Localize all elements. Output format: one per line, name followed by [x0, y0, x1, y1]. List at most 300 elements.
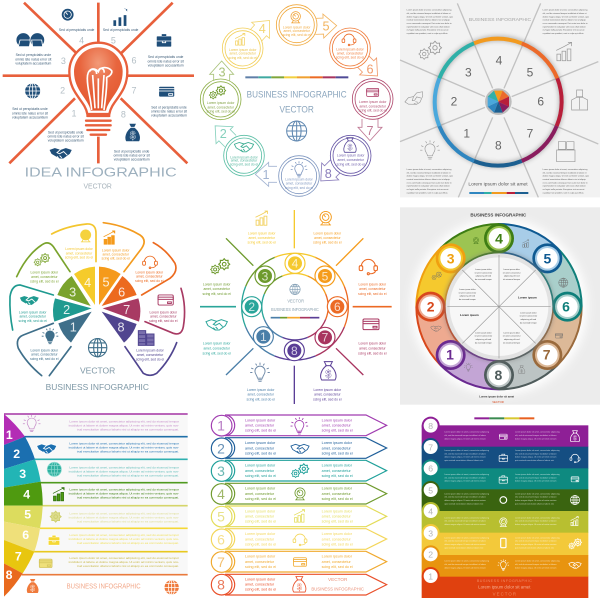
band text: dolore magna aliqua. Ut enim ad minim veniam: [515, 543, 557, 546]
numbered discs: 4: [292, 257, 299, 271]
row text: Lorem ipsum dolor: [245, 464, 276, 468]
band text: dolore magna aliqua. Ut enim ad minim veniam: [444, 437, 486, 440]
outer text: Lorem ipsum dolor: [247, 388, 275, 392]
numbered discs: 1: [260, 330, 267, 344]
row text: trud exercitation ullamco laboris nisi ut aliquip ex ea commodo consequat.: [77, 449, 179, 453]
tab numbers: 4: [428, 506, 433, 516]
spokes: [200, 210, 392, 404]
text blocks: omnis iste natus error sit: [15, 57, 52, 61]
petal text: scing elit, sed do ei: [149, 319, 178, 323]
row text: Lorem ipsum dolor sit amet, consectetur adipiscing elit, sed do eiusmod tempor: [69, 419, 179, 423]
row text: amet, consectetur: [322, 469, 352, 473]
row text: scing elit, sed do ei: [322, 429, 353, 433]
outer text: amet, consectetur: [359, 287, 386, 291]
row text: Lorem ipsum dolor: [322, 532, 353, 536]
arc numbers: 3: [19, 467, 26, 481]
circle text: scing elit, sed do ei: [230, 163, 258, 167]
row text: Lorem ipsum dolor sit amet, consectetur adipiscing elit, sed do eiusmod tempor: [69, 488, 179, 492]
center text: adipiscing elit sed: [475, 338, 491, 341]
text blocks: nostrud exercitation ullamco laboris nisi ut aliquip: [543, 178, 587, 181]
text blocks: Sed ut perspiciatis unde: [16, 53, 51, 57]
title: BUSINESS INFOGRAPHIC: [469, 17, 532, 23]
row numbers: 5: [217, 509, 225, 525]
text blocks: reprehenderit in voluptate velit esse cillum dolore: [407, 25, 451, 28]
circle text: Lorem ipsum dolor: [283, 25, 311, 29]
row text: Lorem ipsum dolor: [245, 555, 276, 559]
band text: elit, sed do eiusmod tempor incididunt ut labore: [515, 452, 557, 455]
text blocks: omnis iste natus error sit: [148, 59, 184, 63]
row numbers: [217, 418, 225, 593]
arrow 6: [211, 529, 387, 550]
circle text: Lorem ipsum dolor: [337, 154, 365, 158]
outer text: scing elit, sed do ei: [247, 397, 275, 401]
band text: Lorem ipsum dolor sit amet, consectetur adipiscing: [515, 516, 560, 519]
band text: dolore magna aliqua. Ut enim ad minim veniam: [444, 480, 486, 483]
rainbow bar: [245, 74, 348, 80]
arrow 7: [211, 551, 387, 572]
outer text: scing elit, sed do ei: [248, 241, 276, 245]
row text: scing elit, sed do ei: [322, 565, 353, 569]
outer text: scing elit, sed do ei: [358, 351, 387, 355]
petal text: scing elit, sed do ei: [102, 257, 130, 261]
row text: Lorem ipsum dolor: [245, 441, 276, 445]
text blocks: reprehenderit in voluptate velit esse cillum dolore: [543, 185, 587, 188]
band text: dolore magna aliqua. Ut enim ad minim veniam: [444, 566, 486, 569]
number discs: [420, 228, 578, 385]
row text: Lorem ipsum dolor sit amet, consectetur adipiscing elit, sed do eiusmod tempor: [69, 512, 179, 516]
outer text: [203, 231, 387, 401]
band text: quis nostrud exercitation ullamco laboris nisi: [444, 502, 484, 505]
petal text: Lorem ipsum dolor: [136, 270, 164, 274]
row text: trud exercitation ullamco laboris nisi ut aliquip ex ea commodo consequat.: [77, 427, 179, 431]
row text: amet, consectetur: [245, 515, 275, 519]
center text: adipiscing elit sed: [459, 295, 475, 298]
petal text: Lorem ipsum dolor: [150, 310, 178, 314]
band text: Lorem ipsum dolor sit amet, consectetur adipiscing: [515, 473, 560, 476]
center bar: [271, 315, 319, 320]
row icons: [291, 417, 309, 592]
arc numbers: 2: [13, 447, 20, 461]
circle text: scing elit, sed do ei: [283, 33, 311, 37]
row text: [245, 418, 353, 592]
numbers: 5: [543, 250, 551, 266]
row text: amet, consectetur: [322, 560, 352, 564]
outer text: scing elit, sed do ei: [313, 241, 342, 245]
band text: elit, sed do eiusmod tempor incididunt ut labore: [515, 434, 557, 437]
row text: scing elit, sed do ei: [322, 542, 353, 546]
center text: Lorem ipsum dolor: [475, 268, 492, 271]
text blocks: [12, 28, 187, 162]
text blocks: ex ea commodo consequat. Duis aute irure dolor in: [543, 22, 588, 25]
circle text: Lorem ipsum dolor: [359, 100, 387, 104]
rows background: [4, 414, 188, 575]
pie wedges: [53, 267, 140, 343]
circle text: Lorem ipsum dolor: [207, 101, 235, 105]
center labels: Lorem ipsum: [460, 313, 479, 317]
row text: trud exercitation ullamco laboris nisi ut aliquip ex ea commodo consequat.: [77, 496, 179, 500]
panel: grey wheel: [400, 0, 600, 197]
step numbers: 3: [61, 56, 66, 66]
arc numbers: 5: [24, 507, 31, 521]
arrow 1: [211, 415, 387, 436]
step numbers: 8: [121, 109, 126, 119]
tab numbers: 1: [428, 571, 433, 581]
numbers: 8: [494, 367, 502, 383]
circle text: scing elit, sed do ei: [359, 109, 387, 113]
outer text: amet, consectetur: [203, 346, 231, 350]
center text: do eiusmod tempor: [475, 278, 492, 281]
outer icons: [206, 211, 379, 381]
petal text: Lorem ipsum dolor: [31, 348, 59, 352]
row text: incididunt ut labore et dolore magna aliqua. Ut enim ad minim veniam, quis nos-: [69, 492, 179, 496]
arrow 4: [211, 483, 387, 504]
text blocks: dolore magna aliqua. Ut enim ad minim veniam, quis: [407, 15, 453, 18]
text blocks: Lorem ipsum dolor sit amet, consectetur adipiscing: [407, 168, 451, 171]
text blocks: Sed ut perspiciatis unde: [114, 149, 150, 153]
tab numbers: [428, 421, 433, 581]
center text: do eiusmod tempor: [459, 298, 476, 301]
outer text: amet, consectetur: [314, 236, 341, 240]
row text: amet, consectetur: [322, 515, 352, 519]
ring shadow: [435, 38, 562, 165]
row text: amet, consectetur: [245, 560, 275, 564]
band text: elit, sed do eiusmod tempor incididunt ut labore: [515, 496, 557, 499]
band text: elit, sed do eiusmod tempor incididunt ut labore: [444, 452, 487, 455]
text blocks: Sed ut perspiciatis unde: [151, 105, 187, 109]
outer text: Lorem ipsum dolor: [314, 231, 342, 235]
row numbers: 2: [217, 440, 225, 456]
row text: Lorem ipsum dolor sit amet, consectetur adipiscing elit, sed do eiusmod tempor: [69, 466, 179, 470]
text blocks: eu fugiat nulla pariatur. Excepteur sint occaecat: [543, 188, 585, 191]
glow: [411, 218, 587, 395]
text blocks: voluptatem accusantium: [151, 114, 187, 118]
bands: [422, 425, 588, 598]
band icons: [498, 431, 581, 570]
text blocks: Sed ut perspiciatis unde: [59, 28, 95, 32]
outer text: Lorem ipsum dolor: [203, 342, 231, 346]
panel: swoosh ring: [400, 207, 600, 405]
arc numbers: 4: [23, 487, 30, 501]
row numbers: 6: [217, 531, 225, 547]
row text: Lorem ipsum dolor: [245, 487, 276, 491]
ring circles: [200, 5, 393, 196]
center hub: [485, 88, 512, 115]
circle text: Lorem ipsum dolor: [230, 155, 259, 159]
arrow 2: [211, 438, 387, 459]
band text: Lorem ipsum dolor sit amet, consectetur adipiscing: [444, 516, 489, 519]
row text: Lorem ipsum dolor: [322, 555, 353, 559]
row text: Lorem ipsum dolor: [245, 532, 276, 536]
row text: Lorem ipsum dolor: [322, 509, 353, 513]
title: BUSINESS INFOGRAPHIC: [247, 90, 347, 100]
row text: Lorem ipsum dolor: [245, 577, 276, 581]
arrow 5: [211, 506, 387, 527]
title: BUSINESS INFOGRAPHIC: [311, 587, 365, 592]
numbers: 5: [527, 65, 534, 79]
row text: Lorem ipsum dolor: [245, 418, 276, 422]
center text: do eiusmod tempor: [503, 341, 520, 344]
arrow numbers: 5: [322, 20, 330, 34]
center text: sit amet consectetur: [474, 271, 493, 274]
center text: adipiscing elit sed: [504, 275, 520, 278]
caption: Lorem ipsum dolor sit amet: [479, 395, 514, 399]
text blocks: nostrud exercitation ullamco laboris nisi ut aliquip: [407, 19, 451, 22]
text blocks: voluptatem accusantium: [15, 61, 52, 65]
band text: elit, sed do eiusmod tempor incididunt ut labore: [515, 540, 557, 543]
tab numbers: 7: [428, 442, 433, 452]
ring segments: [416, 223, 582, 390]
petal text: amet, consectetur: [31, 353, 58, 357]
title: BUSINESS INFOGRAPHIC: [46, 382, 149, 392]
numbered discs: 2: [248, 300, 255, 314]
arrow numbers: 7: [366, 124, 374, 138]
arrow 3: [211, 460, 387, 481]
wedge numbers: 4: [84, 276, 91, 290]
band text: dolore magna aliqua. Ut enim ad minim veniam: [515, 456, 557, 459]
center globe: [290, 284, 300, 294]
text blocks: nostrud exercitation ullamco laboris nisi ut aliquip: [543, 19, 587, 22]
row text: amet, consectetur: [245, 446, 275, 450]
band text: elit, sed do eiusmod tempor incididunt ut labore: [515, 520, 557, 523]
outer text: Lorem ipsum dolor: [359, 282, 387, 286]
text blocks: voluptatem accusantium: [48, 139, 84, 143]
icon: globe: [287, 121, 307, 141]
step numbers: 1: [71, 109, 76, 119]
segment 8: [499, 355, 547, 375]
row text: Lorem ipsum dolor: [322, 487, 353, 491]
wedge numbers: 6: [118, 285, 125, 299]
text blocks: Lorem ipsum dolor sit amet, consectetur adipiscing: [543, 9, 587, 12]
arrow numbers: 1: [262, 168, 270, 182]
petal text: scing elit, sed do ei: [65, 255, 93, 259]
row text: trud exercitation ullamco laboris nisi ut aliquip ex ea commodo consequat.: [77, 541, 179, 545]
petal text: [19, 247, 178, 361]
center text: Lorem ipsum dolor: [459, 288, 476, 291]
segment 2: [416, 292, 451, 355]
panel: pie with outlined petals: [10, 223, 185, 392]
text blocks: cupidatat non proident, sunt in culpa qui officia: [407, 32, 448, 35]
row text: trud exercitation ullamco laboris nisi ut aliquip ex ea commodo consequat.: [77, 520, 179, 524]
arc numbers: 8: [6, 568, 13, 582]
center text: sit amet consectetur: [503, 271, 521, 274]
outer text: Lorem ipsum dolor: [248, 231, 276, 235]
icons: [404, 41, 588, 162]
title: BUSINESS INFOGRAPHIC: [67, 581, 141, 590]
colored ring: [435, 39, 562, 166]
text blocks: Lorem ipsum dolor sit amet, consectetur adipiscing: [543, 168, 587, 171]
band text: dolore magna aliqua. Ut enim ad minim veniam: [444, 456, 486, 459]
step numbers: 7: [131, 85, 136, 95]
number tabs: [422, 417, 440, 585]
row text: amet, consectetur: [245, 492, 275, 496]
band text: quis nostrud exercitation ullamco laboris nisi: [515, 546, 554, 549]
outer text: Lorem ipsum dolor: [314, 388, 342, 392]
row text: amet, consectetur: [322, 446, 352, 450]
head of segment 8: [484, 360, 514, 390]
center text: sit amet consectetur: [474, 335, 493, 338]
text blocks: eu fugiat nulla pariatur. Excepteur sint occaecat: [407, 188, 449, 191]
row text: scing elit, sed do ei: [245, 451, 276, 455]
text blocks: elit, sed do eiusmod tempor incididunt ut labore et: [407, 12, 451, 15]
band text: dolore magna aliqua. Ut enim ad minim veniam: [444, 543, 486, 546]
numbers: [427, 230, 570, 383]
ring: [242, 253, 348, 360]
row text: Lorem ipsum dolor: [322, 441, 353, 445]
numbers: 1: [446, 346, 454, 362]
band text: elit, sed do eiusmod tempor incididunt ut labore: [444, 563, 487, 566]
circle text: scing elit, sed do ei: [207, 110, 235, 114]
row text: Lorem ipsum dolor sit amet, consectetur adipiscing elit, sed do eiusmod tempor: [69, 556, 179, 560]
top rainbow bar: [474, 415, 534, 421]
row text: scing elit, sed do ei: [322, 520, 353, 524]
center text: [458, 268, 538, 344]
row text: incididunt ut labore et dolore magna aliqua. Ut enim ad minim veniam, quis nos-: [69, 516, 179, 520]
band text: quis nostrud exercitation ullamco laboris nisi: [515, 502, 554, 505]
band title: BUSINESS INFOGRAPHIC: [477, 579, 532, 583]
band text: elit, sed do eiusmod tempor incididunt ut labore: [444, 434, 487, 437]
petal text: amet, consectetur: [137, 353, 164, 357]
numbers: 7: [543, 346, 551, 362]
band icons: [431, 237, 568, 373]
wedge numbers: 8: [117, 320, 125, 334]
band text: Lorem ipsum dolor sit amet, consectetur adipiscing: [444, 431, 489, 434]
outer text: scing elit, sed do ei: [313, 397, 342, 401]
tab numbers: 6: [428, 464, 433, 474]
text blocks: voluptatem accusantium: [148, 64, 184, 68]
step numbers: 6: [131, 55, 136, 65]
text blocks: omnis iste natus error sit: [12, 111, 48, 115]
band text: Lorem ipsum dolor sit amet, consectetur adipiscing: [515, 560, 560, 563]
band caption: Lorem ipsum dolor sit amet: [478, 585, 531, 590]
outer text: amet, consectetur: [203, 287, 231, 291]
panel: ring with spokes: [200, 210, 392, 404]
circle text: Lorem ipsum dolor: [229, 48, 257, 52]
row text: incididunt ut labore et dolore magna aliqua. Ut enim ad minim veniam, quis nos-: [69, 445, 179, 449]
petal text: amet, consectetur: [136, 275, 163, 279]
petal text: Lorem ipsum dolor: [136, 349, 165, 353]
row text: amet, consectetur: [322, 424, 352, 428]
step numbers: 2: [60, 85, 65, 95]
band text: Lorem ipsum dolor sit amet, consectetur adipiscing: [515, 492, 560, 495]
text blocks: dolore magna aliqua. Ut enim ad minim veniam, quis: [407, 175, 453, 178]
panel background: [400, 207, 600, 405]
outer text: Lorem ipsum dolor: [359, 342, 387, 346]
center text: sit amet consectetur: [503, 335, 521, 338]
band text: dolore magna aliqua. Ut enim ad minim veniam: [515, 499, 557, 502]
wedge numbers: [63, 275, 130, 334]
spokes: [400, 3, 598, 197]
outer text: scing elit, sed do ei: [358, 292, 387, 296]
band text: quis nostrud exercitation ullamco laboris nisi: [515, 459, 554, 462]
numbers: 7: [527, 127, 534, 141]
petal icons: [19, 230, 173, 357]
text blocks: eu fugiat nulla pariatur. Excepteur sint occaecat: [543, 29, 585, 32]
circle text: Lorem ipsum dolor: [285, 177, 314, 181]
band text: elit, sed do eiusmod tempor incididunt ut labore: [515, 563, 557, 566]
circle text: amet, consectetur: [207, 105, 235, 109]
text blocks: reprehenderit in voluptate velit esse cillum dolore: [543, 25, 587, 28]
numbered discs: 7: [322, 331, 329, 345]
band text: Lorem ipsum dolor sit amet, consectetur adipiscing: [444, 560, 489, 563]
row text: Lorem ipsum dolor: [322, 464, 353, 468]
row text: amet, consectetur: [245, 537, 275, 541]
panel: horizontal bars with left arc: [4, 414, 188, 597]
circle text: scing elit, sed do ei: [285, 186, 313, 190]
arrow numbers: 4: [259, 22, 266, 36]
center text: do eiusmod tempor: [503, 278, 520, 281]
icon: lightbulb: [69, 43, 127, 135]
center text: Lorem ipsum dolor: [520, 311, 537, 314]
center text: adipiscing elit sed: [475, 275, 491, 278]
row lines: [4, 414, 188, 575]
step numbers: [60, 35, 136, 119]
row text: amet, consectetur: [245, 469, 275, 473]
center labels: Lorem ipsum: [518, 295, 537, 299]
numbers: 6: [562, 299, 570, 315]
row numbers: 7: [217, 554, 225, 570]
numbers: 3: [447, 250, 455, 266]
panel: arrow rows: [211, 415, 387, 595]
wedge numbers: 7: [123, 303, 130, 317]
band text: Lorem ipsum dolor sit amet, consectetur adipiscing: [515, 536, 560, 539]
band text: Lorem ipsum dolor sit amet, consectetur adipiscing: [444, 449, 489, 452]
outer text: scing elit, sed do ei: [203, 292, 231, 296]
text blocks: ex ea commodo consequat. Duis aute irure dolor in: [407, 181, 452, 184]
segment 3: [431, 243, 466, 307]
center title: BUSINESS INFOGRAPHIC: [271, 307, 319, 313]
band text: dolore magna aliqua. Ut enim ad minim veniam: [515, 437, 557, 440]
text blocks: cupidatat non proident, sunt in culpa qui officia: [543, 191, 584, 194]
outer text: amet, consectetur: [359, 346, 386, 350]
text blocks: cupidatat non proident, sunt in culpa qui officia: [407, 191, 448, 194]
petal text: Lorem ipsum dolor: [19, 310, 47, 314]
row text: incididunt ut labore et dolore magna aliqua. Ut enim ad minim veniam, quis nos-: [69, 560, 179, 564]
text blocks: omnis iste natus error sit: [151, 110, 187, 114]
circle text: amet, consectetur: [283, 29, 311, 33]
row numbers: 1: [217, 418, 225, 434]
petal text: amet, consectetur: [150, 315, 177, 319]
text blocks: eu fugiat nulla pariatur. Excepteur sint occaecat: [407, 29, 449, 32]
panel: stacked colored bands: [422, 417, 588, 598]
numbers: 6: [537, 94, 544, 108]
center subtitle: VECTOR: [287, 299, 304, 305]
outer text: amet, consectetur: [247, 393, 275, 397]
row text: Lorem ipsum dolor sit amet, consectetur adipiscing elit, sed do eiusmod tempor: [69, 441, 179, 445]
segment 1: [436, 340, 499, 375]
band text: Lorem ipsum dolor sit amet, consectetur adipiscing: [515, 449, 560, 452]
row text: scing elit, sed do ei: [322, 474, 353, 478]
subtitle: VECTOR: [83, 182, 112, 191]
wedge numbers: 3: [69, 285, 76, 299]
row text: scing elit, sed do ei: [245, 497, 276, 501]
petal text: amet, consectetur: [102, 253, 130, 257]
band text: dolore magna aliqua. Ut enim ad minim veniam: [444, 499, 486, 502]
text blocks: elit, sed do eiusmod tempor incididunt ut labore et: [407, 171, 451, 174]
band text: Lorem ipsum dolor sit amet, consectetur adipiscing: [444, 492, 489, 495]
row icons: [23, 415, 179, 595]
row text: scing elit, sed do ei: [322, 497, 353, 501]
band text: elit, sed do eiusmod tempor incididunt ut labore: [444, 476, 487, 479]
row text: amet, consectetur: [245, 424, 275, 428]
icons: [16, 8, 175, 159]
text blocks: nostrud exercitation ullamco laboris nisi ut aliquip: [407, 178, 451, 181]
circle text: Lorem ipsum dolor: [336, 47, 365, 51]
center disc: [444, 251, 554, 362]
center text: adipiscing elit sed: [520, 318, 536, 321]
text blocks: [407, 9, 589, 194]
center text: Lorem ipsum dolor: [503, 268, 520, 271]
row text: scing elit, sed do ei: [245, 474, 276, 478]
